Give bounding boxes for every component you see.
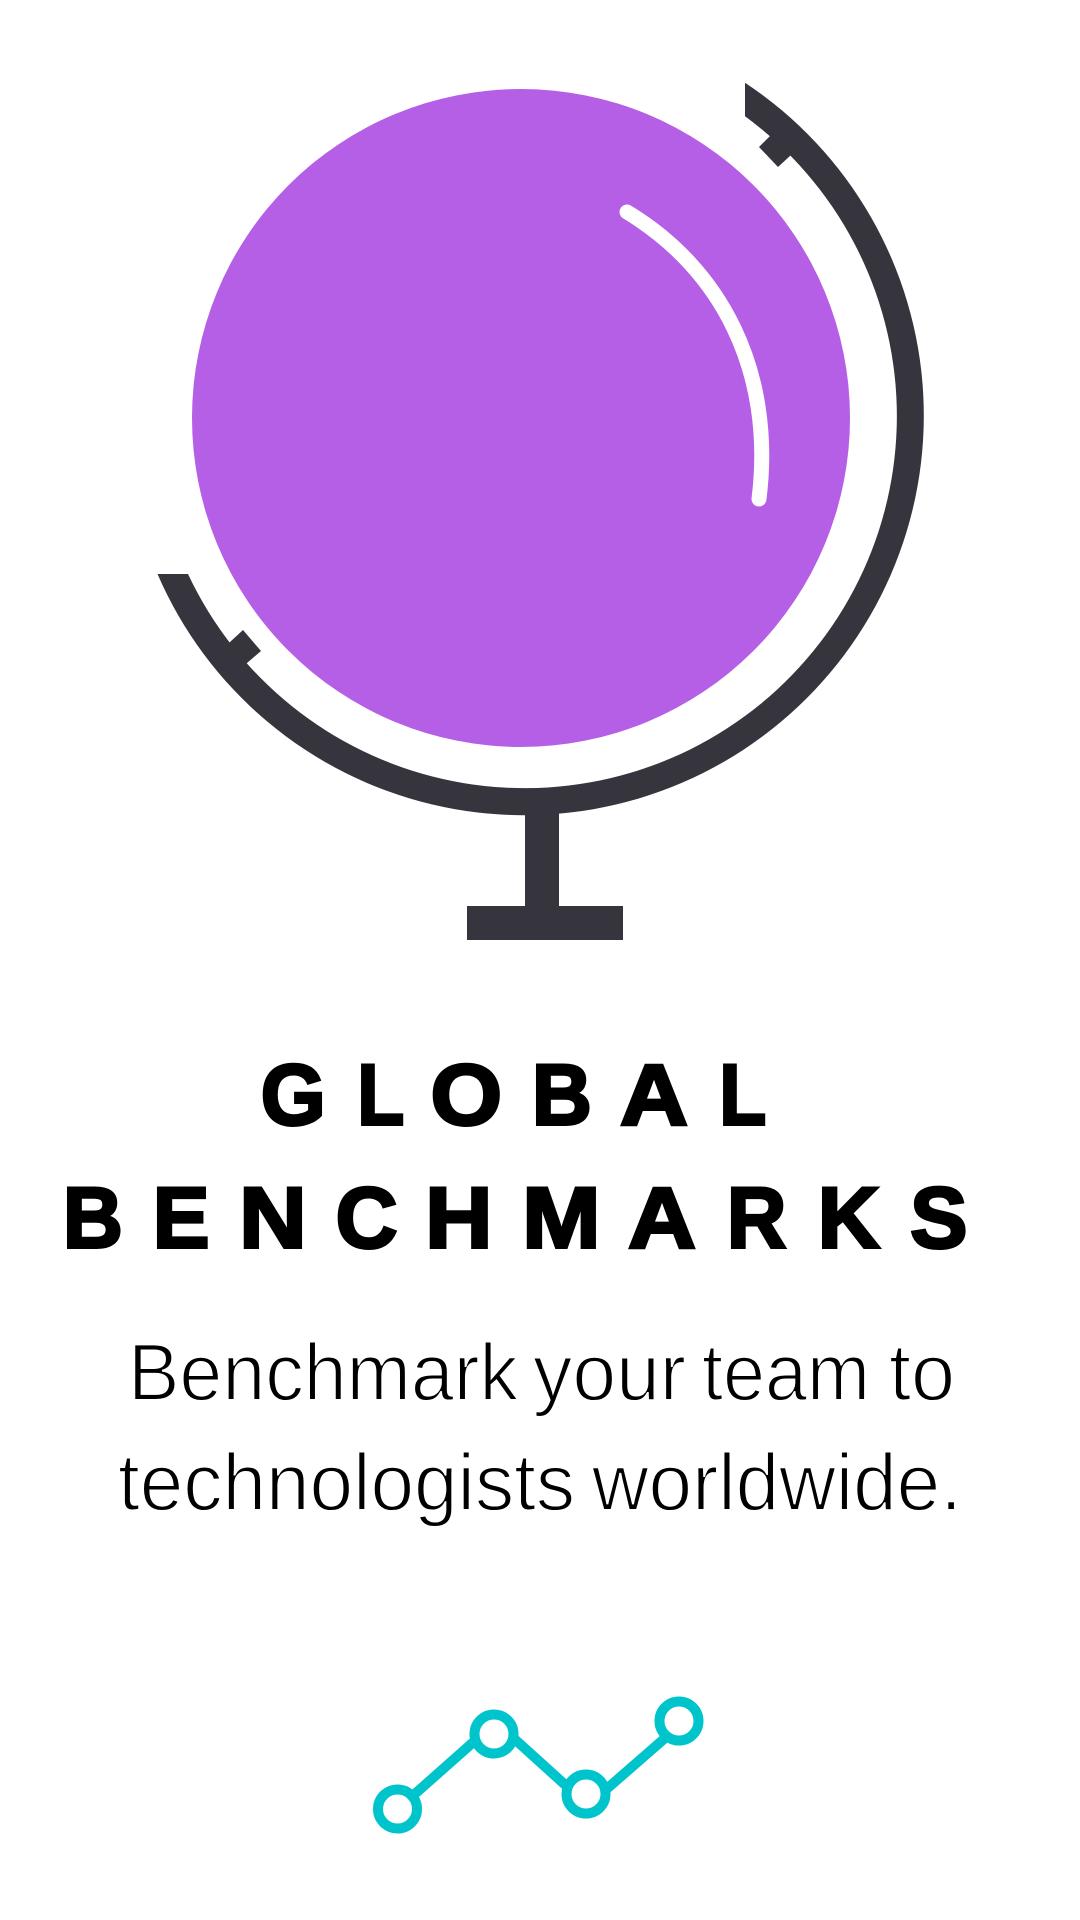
- title line 2: H: [425, 1170, 493, 1266]
- title line 2: R: [727, 1170, 786, 1266]
- subtitle line 1: your: [533, 1328, 686, 1418]
- title line 1: B: [532, 1048, 592, 1144]
- subtitle line 1: team: [702, 1328, 870, 1418]
- title line 2: A: [628, 1170, 696, 1266]
- title line 1: L: [719, 1048, 766, 1144]
- chart segment 1: [408, 1738, 478, 1800]
- title line 2: K: [818, 1170, 880, 1266]
- title line 2: S: [910, 1170, 968, 1266]
- globe meridian arc: [158, 83, 924, 815]
- icon: line chart: [378, 1702, 698, 1828]
- globe highlight: [627, 212, 762, 499]
- subtitle line 1: Benchmark: [128, 1328, 518, 1418]
- bottom axis pin: [218, 630, 261, 675]
- title line 1: G: [261, 1048, 326, 1144]
- title line 2: B: [63, 1170, 123, 1266]
- title line 1: O: [430, 1048, 502, 1144]
- chart point 1: [378, 1790, 417, 1828]
- title: [63, 1048, 967, 1266]
- subtitle text: [118, 1328, 962, 1528]
- title line 1: A: [620, 1048, 688, 1144]
- title line 2: N: [239, 1170, 307, 1266]
- chart segment 2: [510, 1735, 572, 1791]
- top axis pin: [759, 125, 800, 167]
- title line 2: C: [336, 1170, 398, 1266]
- subtitle line 2: technologists: [118, 1438, 575, 1528]
- icon: globe: [158, 83, 924, 940]
- globe sphere: [192, 89, 850, 747]
- chart segment 3: [602, 1732, 672, 1793]
- chart point 3: [566, 1774, 606, 1814]
- title line 2: E: [153, 1170, 210, 1266]
- chart point 2: [474, 1714, 514, 1754]
- subtitle line 1: to: [889, 1328, 955, 1418]
- title line 1: L: [357, 1048, 404, 1144]
- subtitle line 2: worldwide.: [591, 1438, 962, 1528]
- globe stand: [467, 808, 623, 940]
- title line 2: M: [522, 1170, 601, 1266]
- chart point 4: [660, 1702, 698, 1740]
